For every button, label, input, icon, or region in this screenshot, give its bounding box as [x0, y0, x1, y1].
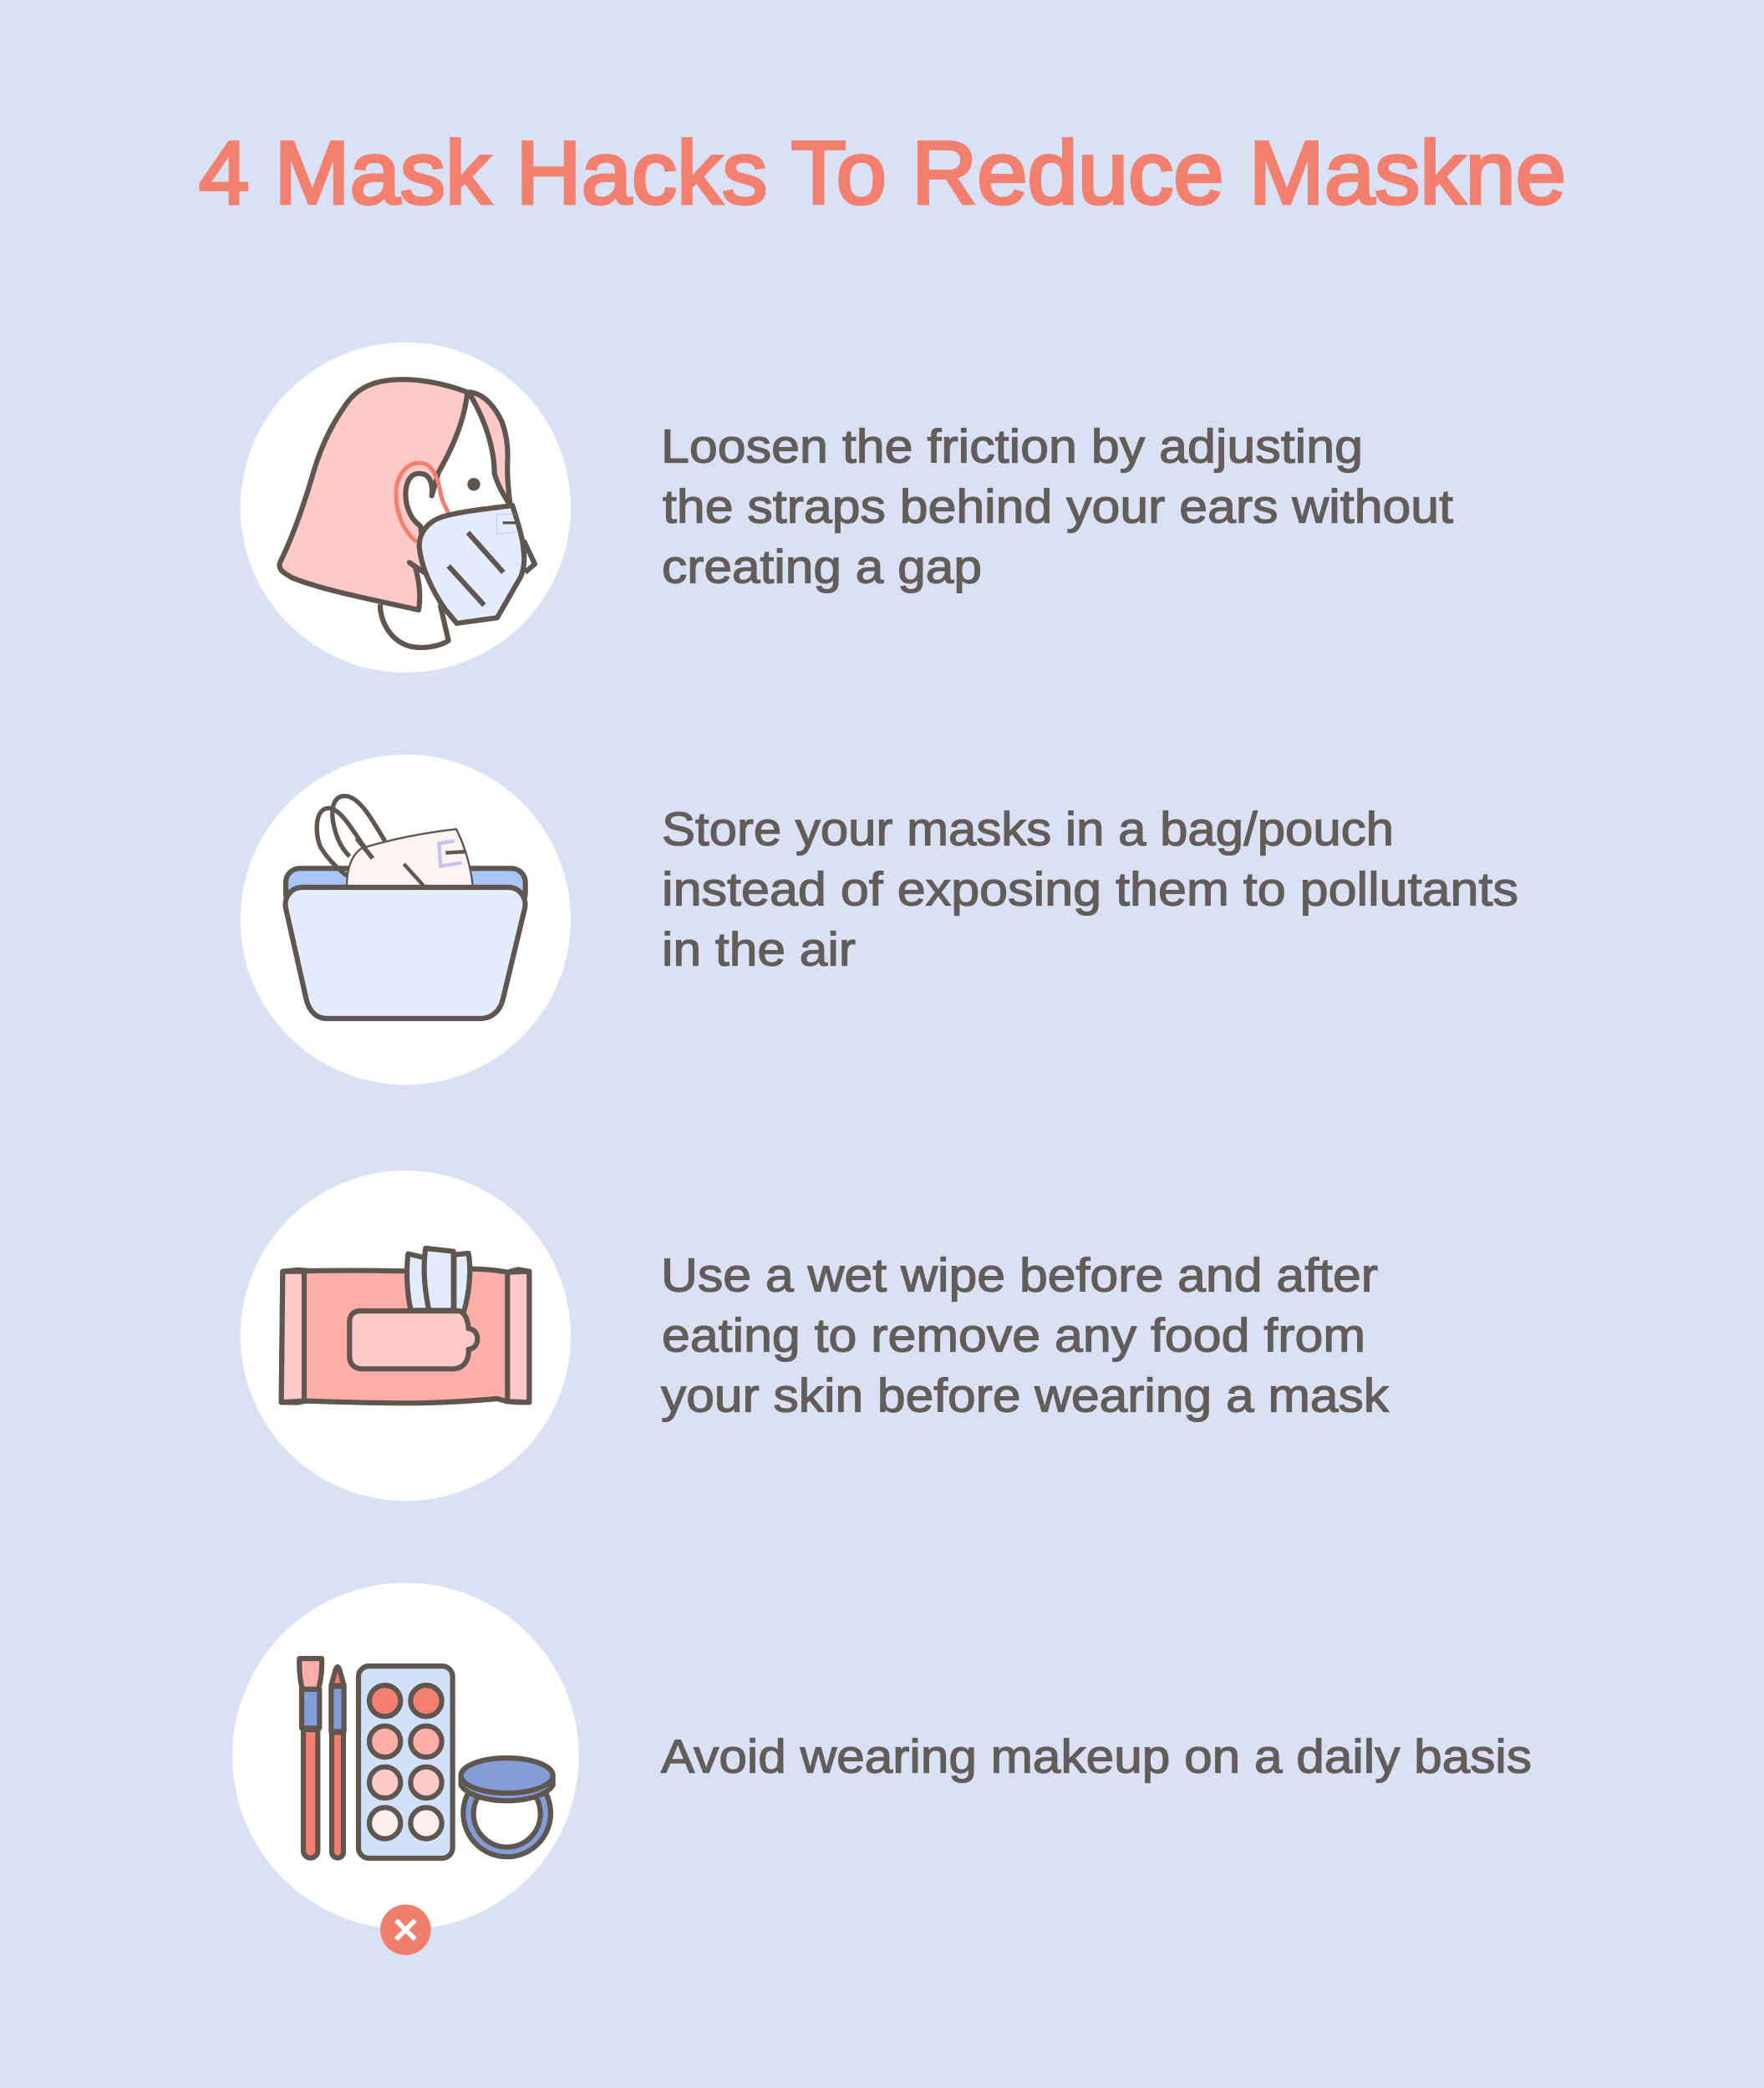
panel: hack 2 icon, mask in pouch [241, 754, 571, 1085]
stored mask [347, 829, 473, 887]
text block: hack 1 [661, 419, 1453, 593]
pouch back [286, 868, 526, 907]
text block: hack 2 [662, 802, 1518, 976]
icon background circle [241, 1171, 571, 1501]
ear strap highlight [396, 463, 449, 541]
far side hair [469, 392, 511, 505]
eyeshadow palette [358, 1666, 453, 1858]
icon background circle [232, 1583, 579, 1929]
front wipe sheet [424, 1248, 454, 1310]
mask straps [317, 796, 385, 881]
title: 4 Mask Hacks To Reduce Maskne [199, 123, 1566, 223]
panel: hack 4 icon, makeup [232, 1583, 579, 1955]
pack end strips [282, 1272, 529, 1402]
neck [380, 604, 449, 648]
hair [279, 379, 467, 610]
text block: hack 2: in the air [662, 922, 856, 976]
chin line [524, 541, 535, 572]
pack lid tab [349, 1311, 477, 1369]
text block: hack 3 [661, 1249, 1390, 1422]
strap front piece [357, 838, 373, 858]
eye [467, 478, 480, 490]
face mask [419, 505, 524, 623]
mask stitching [439, 841, 462, 866]
icon background circle [241, 343, 571, 673]
text block: hack 1: the straps behind your ears without [663, 480, 1453, 533]
panel: hack 1 icon, adjusting mask straps [241, 343, 571, 673]
text block: hack 2: instead of exposing them to pollutants [662, 862, 1518, 916]
panel: hack 3 icon, wet wipes [241, 1171, 571, 1501]
pouch front [286, 887, 525, 1019]
text block: hack 3: Use a wet wipe before and after [661, 1249, 1378, 1303]
text block: hack 4: Avoid wearing makeup on a daily basis [661, 1730, 1532, 1783]
text block: hack 1: Loosen the friction by adjusting [661, 419, 1363, 473]
mask tab [503, 519, 520, 527]
text block: hack 2: Store your masks in a bag/pouch [662, 802, 1394, 856]
powder compact [461, 1758, 553, 1857]
icon background circle [241, 754, 571, 1085]
text block: hack 1: creating a gap [662, 540, 982, 593]
makeup brush [299, 1659, 322, 1858]
mask pleats [449, 532, 503, 605]
wipes pack [282, 1269, 529, 1403]
avoid badge [380, 1904, 431, 1955]
text block: hack 3: eating to remove any food from [662, 1309, 1365, 1363]
mask stitching [496, 514, 516, 534]
text block: hack 3: your skin before wearing a mask [661, 1369, 1390, 1422]
eye pencil [331, 1667, 344, 1858]
mask tab and pleat [404, 851, 465, 887]
wipe sheets [407, 1253, 470, 1312]
